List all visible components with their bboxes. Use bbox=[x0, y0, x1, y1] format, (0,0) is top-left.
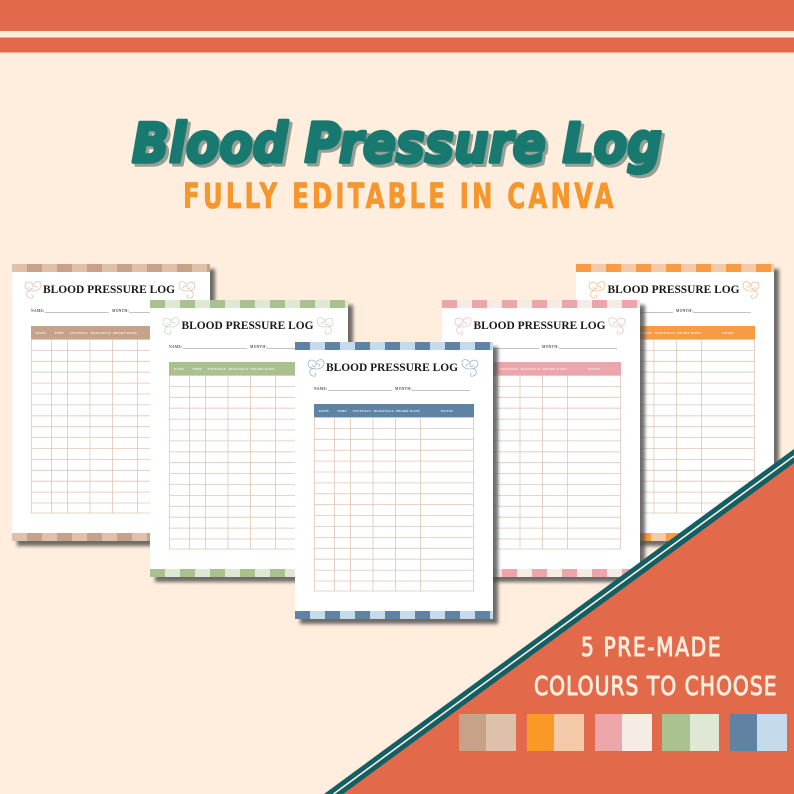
panel: orange log sheet bbox=[576, 264, 779, 546]
panel: pink log sheet bbox=[442, 300, 645, 582]
panel: blue log sheet: NOTES bbox=[441, 409, 453, 413]
panel: tan log sheet: HEART RATE bbox=[113, 331, 137, 335]
panel: green log sheet: HEART RATE bbox=[251, 367, 275, 371]
panel: blue log sheet: BLOOD PRESSURE LOG bbox=[326, 360, 458, 374]
panel: blue log sheet: DATE bbox=[319, 409, 330, 413]
panel: pink log sheet: MONTH: bbox=[542, 345, 559, 349]
panel: tan log sheet: NOTES bbox=[158, 331, 170, 335]
title: Blood Pressure Log bbox=[132, 112, 662, 175]
panel: blue log sheet: TIME bbox=[337, 409, 347, 413]
subtitle: FULLY EDITABLE IN CANVA bbox=[183, 177, 614, 217]
panel: tan log sheet: BLOOD PRESSURE LOG bbox=[43, 282, 175, 296]
swatch: green bbox=[662, 714, 719, 751]
panel: orange log sheet: NOTES bbox=[722, 331, 734, 335]
panel: green log sheet: NAME: bbox=[169, 345, 183, 349]
panel: pink log sheet: NOTES bbox=[588, 367, 600, 371]
panel: green log sheet: TIME bbox=[192, 367, 202, 371]
panel: tan log sheet bbox=[12, 264, 215, 546]
panel: pink log sheet: NAME: bbox=[461, 345, 475, 349]
callout: 5 pre-made: 5 PRE-MADE bbox=[581, 633, 721, 663]
panel: pink log sheet: TIME bbox=[484, 367, 494, 371]
swatch: pink bbox=[595, 714, 652, 751]
panel: blue log sheet: HEART RATE bbox=[396, 409, 420, 413]
colour swatches bbox=[459, 714, 787, 751]
panel: orange log sheet: NAME: bbox=[595, 309, 609, 313]
panel: tan log sheet: DATE bbox=[36, 331, 47, 335]
panel: tan log sheet: TIME bbox=[54, 331, 64, 335]
panel: orange log sheet: TIME bbox=[618, 331, 628, 335]
panel: tan log sheet: SYSTOLIC bbox=[70, 331, 89, 335]
panel: orange log sheet: DIASTOLIC bbox=[655, 331, 676, 335]
panel: orange log sheet: HEART RATE bbox=[677, 331, 701, 335]
panel: green log sheet: DATE bbox=[174, 367, 185, 371]
corner panel: diagonal banner bbox=[324, 449, 794, 794]
panel: green log sheet: MONTH: bbox=[250, 345, 267, 349]
panel: green log sheet: SYSTOLIC bbox=[208, 367, 227, 371]
panel: pink log sheet: DIASTOLIC bbox=[521, 367, 542, 371]
panel: orange log sheet: DATE bbox=[600, 331, 611, 335]
top header band bbox=[0, 0, 794, 52]
panel: blue log sheet: NAME: bbox=[314, 387, 328, 391]
swatch: tan bbox=[459, 714, 516, 751]
panel: blue log sheet: SYSTOLIC bbox=[353, 409, 372, 413]
panel: tan log sheet: MONTH: bbox=[112, 309, 129, 313]
panel: pink log sheet: BLOOD PRESSURE LOG bbox=[474, 318, 606, 332]
panel: pink log sheet: SYSTOLIC bbox=[500, 367, 519, 371]
swatch: orange bbox=[527, 714, 584, 751]
panel: orange log sheet: MONTH: bbox=[676, 309, 693, 313]
panel: green log sheet bbox=[150, 300, 353, 582]
panel: green log sheet: NOTES bbox=[296, 367, 308, 371]
panel: blue log sheet: DIASTOLIC bbox=[374, 409, 395, 413]
callout: colours to choose: COLOURS TO CHOOSE bbox=[534, 672, 777, 702]
panel: green log sheet: DIASTOLIC bbox=[229, 367, 250, 371]
panel: orange log sheet: BLOOD PRESSURE LOG bbox=[608, 282, 740, 296]
panel: tan log sheet: NAME: bbox=[31, 309, 45, 313]
panel: blue log sheet: MONTH: bbox=[395, 387, 412, 391]
panel: tan log sheet: DIASTOLIC bbox=[91, 331, 112, 335]
panel: pink log sheet: HEART RATE bbox=[543, 367, 567, 371]
panel: pink log sheet: DATE bbox=[466, 367, 477, 371]
panel: blue log sheet bbox=[295, 342, 498, 624]
panel: green log sheet: BLOOD PRESSURE LOG bbox=[182, 318, 314, 332]
swatch: blue bbox=[730, 714, 787, 751]
panel: orange log sheet: SYSTOLIC bbox=[634, 331, 653, 335]
